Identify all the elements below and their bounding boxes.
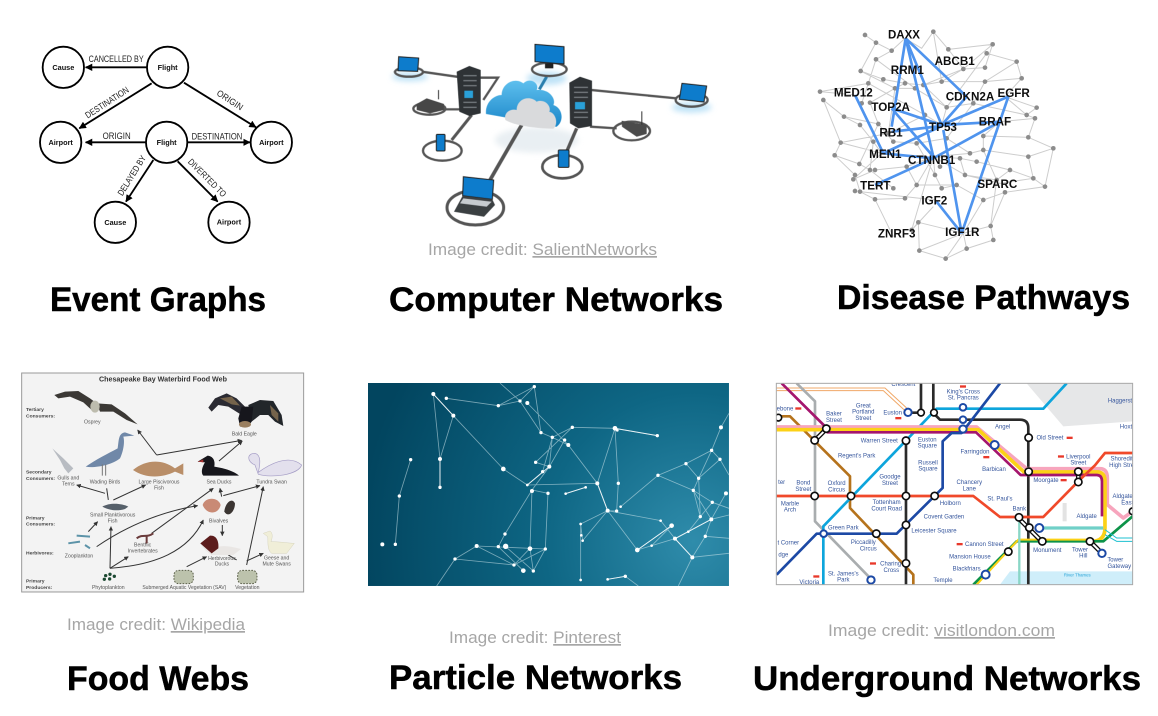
station labels: Street (855, 416, 872, 422)
station labels: Angel (995, 424, 1010, 430)
station labels: East (1121, 500, 1134, 506)
panel: disease pathway network: MEN1 (869, 148, 902, 161)
station labels: Hill (1079, 554, 1087, 560)
station labels: ter (778, 480, 785, 486)
soft blue glows (392, 72, 712, 113)
trophic level labels: Consumers: (26, 476, 55, 482)
panel: event graph diagram: Flight (158, 63, 178, 72)
station labels: Moorgate (1033, 478, 1059, 484)
station labels: St. Paul's (987, 496, 1013, 502)
panel: disease pathway network: EGFR (997, 87, 1030, 100)
rings (395, 63, 708, 225)
station labels: Covent Garden (924, 515, 964, 521)
gene labels: DAXX (888, 28, 920, 41)
species labels: Large Piscivorous (138, 479, 180, 485)
sea duck (198, 456, 239, 476)
trophic level labels (26, 407, 55, 591)
species labels: Phytoplankton (92, 585, 125, 591)
species labels: Submerged Aquatic Vegetation (SAV) (142, 585, 227, 591)
station labels: Bond (796, 481, 810, 487)
station labels: Regent's Park (838, 453, 875, 459)
species labels: Bivalves (209, 519, 229, 525)
station labels: dge (778, 552, 789, 558)
geese and mute swans (263, 531, 294, 553)
station labels: King's Cross (947, 389, 980, 395)
servers (457, 66, 481, 116)
species labels: Wading Birds (90, 479, 121, 485)
panel: event graph diagram: CANCELLED BY (89, 54, 144, 64)
bivalves (203, 499, 221, 512)
herbivorous duck (200, 536, 241, 555)
station labels: River Thames (1064, 573, 1091, 578)
station labels: Holborn (940, 501, 961, 507)
station labels: Square (918, 467, 938, 473)
station labels: Shoredit (1110, 457, 1133, 463)
station labels: Farringdon (961, 450, 989, 456)
station labels: Aldgate (1112, 494, 1133, 500)
species labels: Herbivorous (208, 556, 236, 562)
species labels: Vegetation (235, 585, 260, 591)
station labels: Circus (860, 546, 877, 552)
station labels: Street (1070, 461, 1087, 467)
wading bird (86, 432, 134, 467)
panel: event graph diagram: DIVERTED TO (186, 157, 228, 199)
station labels: Leicester Square (911, 529, 957, 535)
particle connections (395, 383, 729, 586)
station labels: Old Street (1036, 436, 1064, 442)
species labels: Fish (108, 519, 118, 525)
station labels: Blackfriars (953, 567, 981, 573)
image credit: visitlondon.com: Image credit: visitlondon.com (828, 621, 1055, 640)
station labels: Charing (880, 562, 901, 568)
small fish (102, 504, 128, 510)
bald eagle (208, 393, 283, 428)
panel: disease pathway network: TOP2A (871, 101, 911, 114)
station labels: St. James's (828, 571, 859, 577)
station labels: Chancery (957, 480, 982, 486)
heading: Particle Networks: Particle Networks (389, 659, 682, 697)
gull (52, 448, 73, 473)
station labels: Great (856, 403, 871, 409)
trophic level labels: Primary (26, 579, 45, 585)
trophic level labels: Tertiary (26, 407, 44, 413)
device bases (454, 196, 495, 217)
station labels: Euston (883, 410, 902, 416)
blue edges (855, 38, 1008, 233)
panel: disease pathway network (818, 28, 1056, 261)
station labels: Street (882, 481, 898, 487)
species labels: Fish (154, 485, 164, 491)
tundra swan (249, 453, 302, 476)
species labels: Small Planktivorous (90, 513, 136, 519)
station labels: ebone (777, 406, 794, 412)
food web title: Chesapeake Bay Waterbird Food Web (99, 375, 227, 384)
trophic level labels: Herbivores: (26, 551, 54, 557)
trophic level labels: Primary (26, 515, 45, 521)
species labels: Sea Ducks (207, 479, 232, 485)
osprey (54, 391, 138, 424)
stations (775, 409, 1136, 567)
panel: event graph diagram: DESTINATION (83, 85, 131, 120)
panel: disease pathway network: SPARC (977, 178, 1018, 191)
panel: particle network image (368, 383, 729, 586)
species labels: Ducks (215, 562, 230, 568)
panel: event graph diagram: Cause (104, 218, 126, 227)
station labels: Gateway (1107, 564, 1131, 570)
species labels: Bald Eagle (232, 432, 257, 438)
panel: event graph diagram: Flight (157, 138, 177, 147)
heading: Computer Networks: Computer Networks (389, 281, 723, 319)
panel: event graph diagram: Airport (217, 218, 242, 227)
phytoplankton (103, 573, 116, 581)
large piscivorous fish (133, 462, 183, 476)
station labels: Victoria (799, 580, 820, 586)
station labels: Aldgate (1076, 514, 1097, 520)
station labels: Park (837, 578, 849, 584)
trophic level labels: Consumers: (26, 522, 55, 528)
station labels: Court Road (871, 506, 902, 512)
cloud (486, 81, 562, 127)
station labels: Crescent (891, 382, 916, 388)
vegetation (174, 570, 257, 584)
grey nodes (818, 29, 1056, 261)
panel: disease pathway network: ABCB1 (935, 55, 975, 68)
species labels: Gulls and (57, 476, 79, 482)
station labels (777, 382, 1135, 586)
station labels: Street (795, 487, 812, 493)
panel: event graph diagram: ORIGIN (103, 131, 131, 141)
panel: underground tube map (775, 382, 1136, 586)
benthic invertebrates (137, 533, 153, 543)
station labels: Barbican (982, 467, 1006, 473)
heading: Event Graphs: Event Graphs (50, 281, 266, 319)
station labels: Monument (1033, 548, 1062, 554)
station labels: Bank (1012, 507, 1026, 513)
panel: disease pathway network: RB1 (879, 126, 903, 139)
station labels: Arch (784, 508, 796, 514)
image credit: SalientNetworks: Image credit: SalientNetworks (428, 240, 657, 259)
heading: Underground Networks: Underground Networks (753, 660, 1141, 698)
station labels: Haggerst (1108, 399, 1132, 405)
station labels: Liverpool (1066, 454, 1090, 460)
panel: event graph diagram: ORIGIN (215, 88, 245, 112)
tube lines (777, 383, 1133, 585)
station labels: Euston (918, 437, 937, 443)
panel: disease pathway network: CTNNB1 (908, 154, 956, 167)
species labels: Geese and (264, 556, 289, 562)
image credit: Pinterest: Image credit: Pinterest (449, 628, 621, 647)
panel: event graph diagram: Cause (52, 63, 74, 72)
image credit: Wikipedia: Image credit: Wikipedia (67, 615, 246, 634)
grey areas and river (1027, 383, 1133, 426)
station labels: Marble (781, 501, 800, 507)
panel: disease pathway network: RRM1 (891, 64, 924, 77)
station labels: Portland (852, 410, 874, 416)
species labels: Invertebrates (128, 549, 158, 555)
panel: event graph diagram: Airport (259, 138, 284, 147)
station labels: Cross (884, 568, 899, 574)
station labels: Lane (963, 486, 977, 492)
panel: disease pathway network: ZNRF3 (878, 227, 916, 240)
grey edges (820, 32, 1053, 259)
species labels: Zooplankton (65, 553, 93, 559)
station labels: Warren Street (861, 438, 898, 444)
station labels: Circus (828, 487, 845, 493)
arrows (77, 430, 263, 568)
background gradient (368, 383, 729, 586)
station labels: St. Pancras (948, 396, 979, 402)
station labels: Street (826, 418, 842, 424)
national rail markers (795, 385, 1073, 578)
panel: event graph diagram (40, 47, 292, 243)
species labels: Benthic (134, 543, 152, 549)
trophic level labels: Consumers: (26, 413, 55, 419)
species labels: Mute Swans (262, 561, 291, 567)
heading: Food Webs: Food Webs (67, 660, 249, 698)
station labels: Tottenham (873, 500, 901, 506)
connections (422, 72, 677, 180)
panel: food web diagram (22, 373, 304, 592)
panel: event graph diagram: Airport (48, 138, 73, 147)
station labels: Piccadilly (851, 540, 876, 546)
trophic level labels: Producers: (26, 585, 53, 591)
panel: disease pathway network: MED12 (834, 87, 873, 100)
station labels: Cannon Street (965, 542, 1004, 548)
station labels: Hoxt (1120, 424, 1132, 430)
panel: disease pathway network: TP53 (929, 121, 957, 134)
accessible station markers (820, 404, 1106, 584)
station labels: High Stre (1109, 463, 1135, 469)
panel: disease pathway network: CDKN2A (946, 90, 995, 103)
species labels: Terns (62, 482, 75, 488)
station labels: Tower (1107, 558, 1123, 564)
species labels: Tundra Swan (256, 479, 287, 485)
laptop and monitor screens (398, 44, 707, 199)
panel: event graph diagram: DELAYED BY (116, 154, 148, 197)
panel: disease pathway network: TERT (860, 180, 891, 193)
zooplankton (68, 536, 90, 548)
station labels: Green Park (828, 525, 859, 531)
panel: disease pathway network: IGF2 (921, 194, 948, 207)
panel: disease pathway network: BRAF (979, 116, 1011, 129)
station labels: Square (918, 444, 938, 450)
station labels: Russell (918, 460, 938, 466)
heading: Disease Pathways: Disease Pathways (837, 279, 1130, 317)
station labels: t Corner (778, 540, 799, 546)
species labels: Osprey (84, 420, 101, 426)
panel background (22, 373, 304, 592)
particle nodes (380, 385, 728, 581)
species labels (57, 420, 291, 591)
panel: computer network illustration (392, 44, 712, 225)
station labels: Oxford (828, 481, 846, 487)
station labels: Tower (1072, 547, 1088, 553)
panel: event graph diagram: DESTINATION (192, 132, 242, 142)
station labels: Mansion House (949, 554, 991, 560)
station labels: Baker (826, 412, 842, 418)
panel: disease pathway network: IGF1R (945, 226, 980, 239)
map border (776, 383, 1133, 585)
trophic level labels: Secondary (26, 470, 52, 476)
station labels: Temple (933, 578, 953, 584)
station labels: Goodge (879, 475, 901, 481)
